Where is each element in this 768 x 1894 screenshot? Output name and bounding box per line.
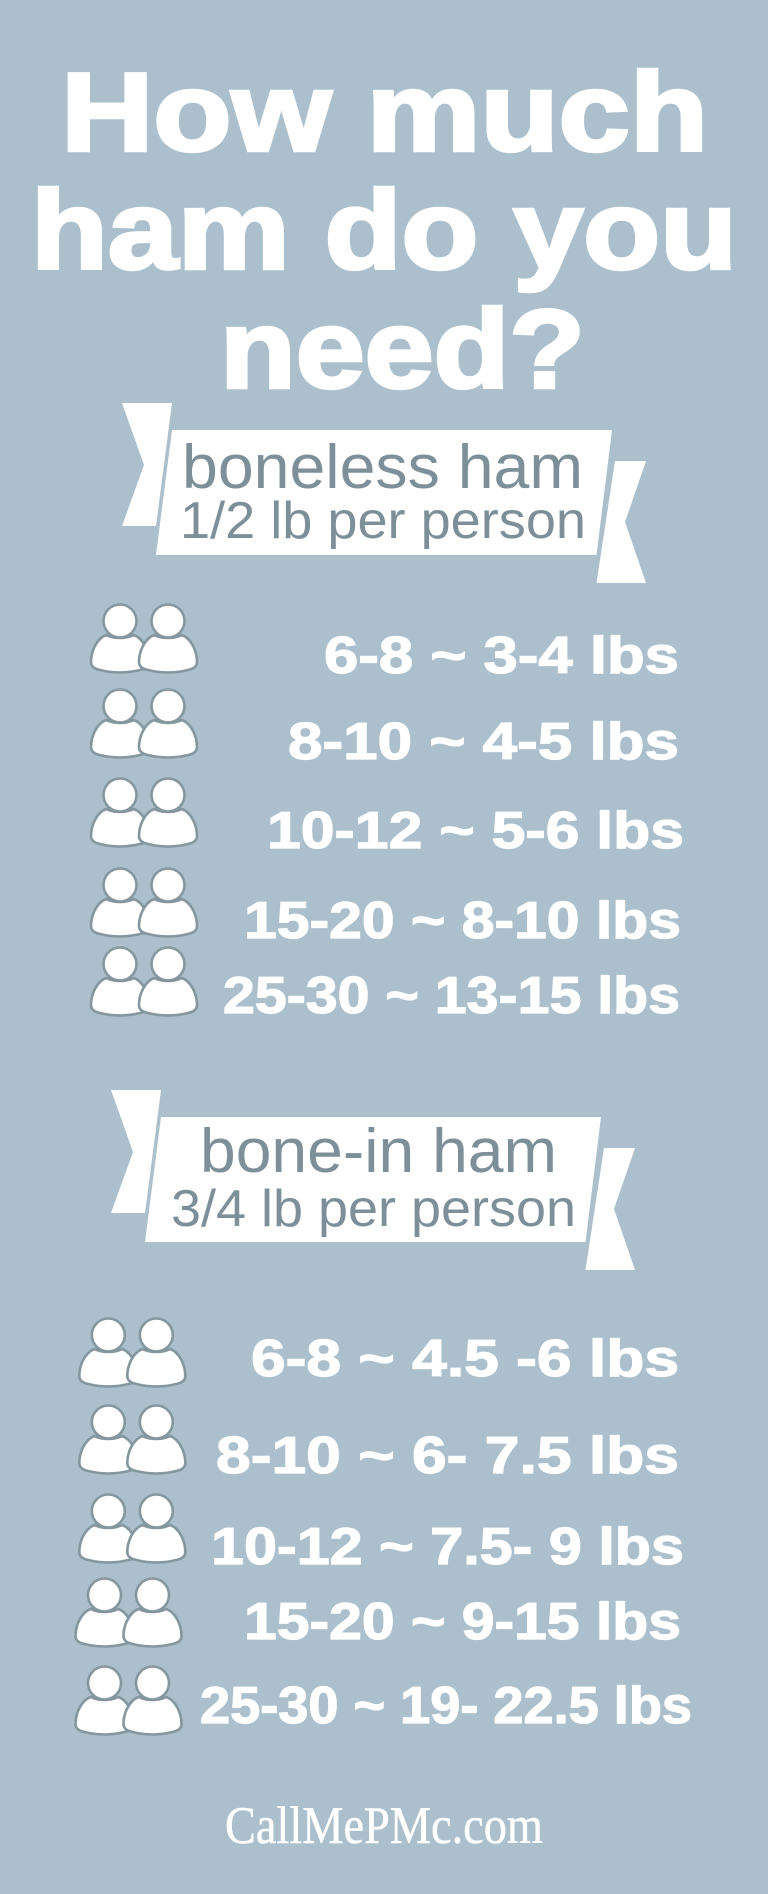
title	[31, 50, 737, 411]
row: 10-12	[79, 1494, 684, 1576]
banner: boneless ham: boneless ham	[182, 433, 583, 502]
row: 10-12: 10-12 ~ 5-6 lbs	[267, 802, 684, 860]
row: 8-10	[79, 1406, 679, 1485]
row: 15-20: 15-20 ~ 8-10 lbs	[244, 892, 681, 950]
row: 25-30	[76, 1666, 692, 1735]
banner: bone-in ham	[111, 1090, 635, 1270]
title: ham do you	[31, 168, 737, 292]
row: 15-20	[91, 868, 681, 950]
banner: boneless ham: 1/2 lb per person	[180, 492, 586, 550]
row: 25-30: 25-30 ~ 13-15 lbs	[223, 967, 680, 1025]
footer: site name: CallMePMc.com	[225, 1797, 543, 1855]
row: 15-20	[76, 1578, 681, 1651]
row: 6-8	[79, 1318, 679, 1388]
banner: bone-in ham: 3/4 lb per person	[171, 1180, 576, 1238]
row: 6-8: 6-8 ~ 3-4 lbs	[324, 627, 679, 685]
title: How much	[61, 50, 708, 174]
row: 8-10	[91, 690, 679, 771]
row: 10-12	[91, 778, 684, 860]
title: need?	[220, 287, 585, 411]
banner: bone-in ham: bone-in ham	[200, 1117, 557, 1186]
row: 8-10: 8-10 ~ 6- 7.5 lbs	[216, 1427, 679, 1485]
boneless rows	[91, 604, 684, 1025]
row: 6-8: 6-8 ~ 4.5 -6 lbs	[251, 1330, 679, 1388]
row: 25-30	[91, 948, 680, 1025]
banner: boneless ham	[122, 403, 646, 583]
bone-in rows	[76, 1318, 692, 1735]
row: 8-10: 8-10 ~ 4-5 lbs	[288, 713, 679, 771]
row: 15-20: 15-20 ~ 9-15 lbs	[244, 1593, 681, 1651]
row: 10-12: 10-12 ~ 7.5- 9 lbs	[211, 1518, 684, 1576]
row: 25-30: 25-30 ~ 19- 22.5 lbs	[200, 1677, 692, 1735]
row: 6-8	[91, 604, 679, 685]
